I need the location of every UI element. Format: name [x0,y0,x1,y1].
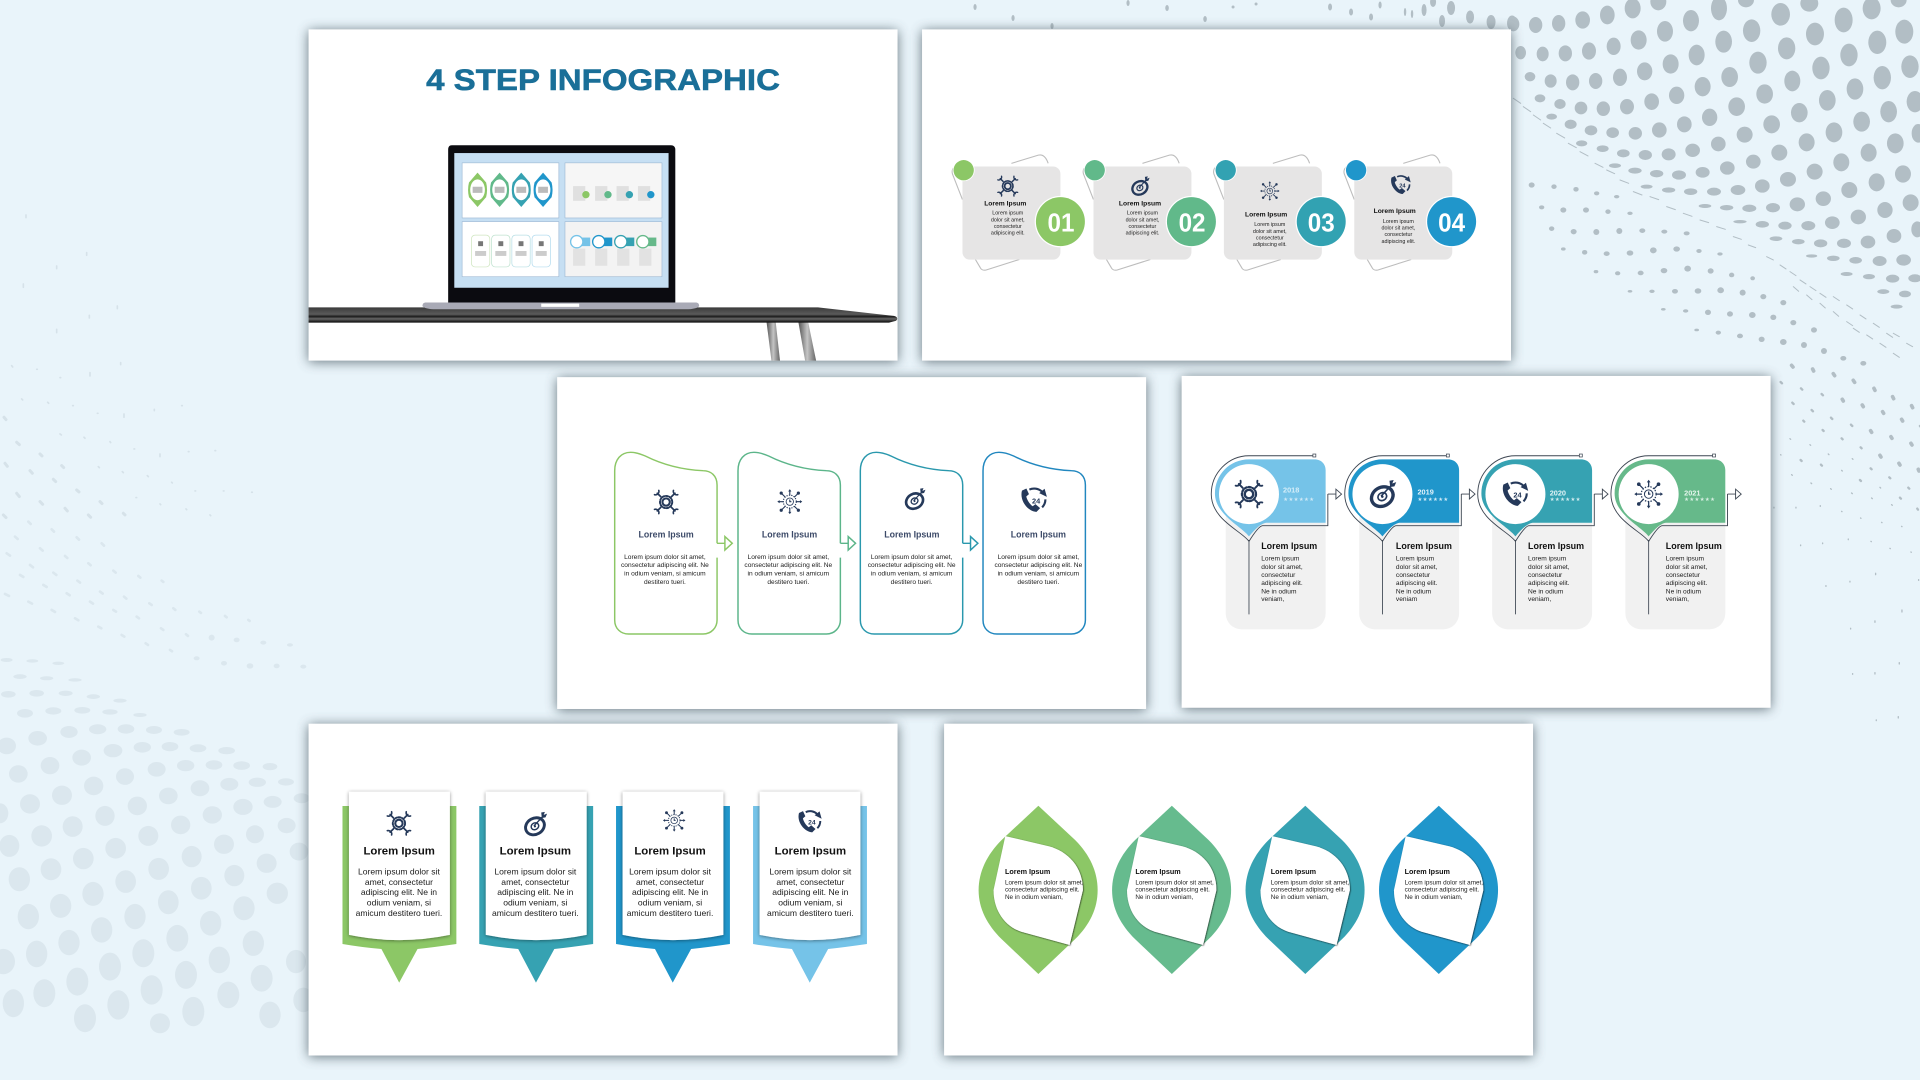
outline card 2: Lorem Ipsum [762,530,817,540]
leaf card 1 [979,806,1098,974]
banner card 2 [479,792,593,983]
timeline step 2019: Lorem ipsum [1396,556,1435,563]
banner card 1: adipiscing elit. Ne in [361,887,437,897]
banner card 3: Lorem ipsum dolor sit [629,866,712,876]
outline card 3: in odium veniam, si amicum [871,571,953,578]
banner card 1: odium veniam, si [367,897,431,907]
leaf card 1: consectetur adipiscing elit. [1005,886,1080,893]
step card 04: dolor sit amet, [1381,226,1416,232]
outline card 1: consectetur adipiscing elit. Ne [621,562,709,569]
step card 02: Lorem Ipsum [1119,201,1161,208]
banner card 2: Lorem Ipsum [500,846,571,858]
outline card 3: consectetur adipiscing elit. Ne [868,562,956,569]
leaf card 1: Ne in odium veniam, [1005,894,1063,901]
leaf card 2: consectetur adipiscing elit. [1135,886,1210,893]
slide: ribbon banner cards [309,724,898,1057]
step card 01: dolor sit amet, [991,217,1025,223]
banner card 4: Lorem Ipsum [775,846,846,858]
outline card 1: Lorem ipsum dolor sit amet, [624,554,706,561]
step card 03 [1214,155,1347,270]
leaf card 4: consectetur adipiscing elit. [1405,886,1479,893]
outline card 2: destitero tueri. [767,579,809,586]
timeline step 2019 [1345,454,1475,629]
step card 02: dolor sit amet, [1126,217,1160,223]
outline card 2: Lorem ipsum dolor sit amet, [748,554,829,561]
banner card 4: amet, consectetur [776,877,845,887]
leaf card 2: Ne in odium veniam, [1135,894,1194,901]
banner card 3: amicum destitero tueri. [627,908,713,918]
leaf card 2 [1112,806,1231,974]
outline card 1: in odium veniam, si amicum [624,571,706,578]
screen thumbnail: numbered cards [565,163,662,218]
screen thumbnail: leaf cards [462,163,559,218]
banner card 2: amicum destitero tueri. [492,908,579,918]
leaf card 3: consectetur adipiscing elit. [1271,886,1346,893]
timeline step 2020: consectetur [1528,572,1563,579]
banner card 1: Lorem ipsum dolor sit [358,866,440,876]
banner card 2: adipiscing elit. Ne in [497,887,574,897]
banner card 1: Lorem Ipsum [363,846,435,858]
timeline step 2019: veniam [1396,596,1418,603]
timeline step 2018 [1211,454,1342,629]
leaf card 4: Lorem Ipsum [1405,867,1450,876]
banner card 3: amet, consectetur [636,877,704,887]
timeline step 2021 [1611,454,1741,629]
banner card 4 [753,792,867,983]
banner card 1: amicum destitero tueri. [356,908,442,918]
timeline step 2018: adipiscing elit. [1261,580,1303,587]
step card 01: Lorem ipsum [992,211,1024,217]
step card 01: adipiscing elit. [991,231,1025,237]
step card 03: Lorem Ipsum [1245,212,1287,219]
table with laptop on it [309,145,897,361]
banner card 3: odium veniam, si [638,897,702,907]
timeline step 2021: ★★★★★★ [1684,497,1715,503]
banner card 4: 24 [808,820,816,827]
step card 04: 24 [1399,183,1406,189]
outline card 2 [738,452,856,634]
timeline step 2019: ★★★★★★ [1417,497,1449,503]
step card 02: Lorem ipsum [1127,211,1158,217]
screen thumbnail: outline cards [462,222,559,277]
outline card 4: 24 [1032,496,1041,505]
timeline step 2020: Lorem Ipsum [1528,541,1584,551]
step card 01: Lorem Ipsum [984,201,1026,208]
slide: leaf shaped cards [944,724,1533,1057]
outline card 1 [615,452,732,634]
timeline step 2020: veniam, [1528,596,1551,603]
banner card 4: Lorem ipsum dolor sit [769,866,852,876]
leaf card 3: Lorem ipsum dolor sit amet, [1271,879,1349,886]
step card 04: adipiscing elit. [1381,239,1415,245]
timeline step 2018: 2018 [1283,485,1299,494]
outline card 3: destitero tueri. [891,579,933,586]
timeline step 2021: veniam, [1666,596,1689,603]
timeline step 2018: ★★★★★★ [1283,497,1314,503]
step card 03: adipiscing elit. [1253,242,1287,248]
banner card 2: odium veniam, si [503,897,568,907]
leaf card 4: Ne in odium veniam, [1405,894,1463,901]
outline card 4: Lorem Ipsum [1011,530,1066,540]
timeline step 2019: dolor sit amet, [1396,564,1438,571]
leaf card 1: Lorem Ipsum [1005,867,1050,876]
timeline step 2019: Ne in odium [1396,588,1432,595]
step card 02: 02 [1179,209,1206,237]
timeline step 2020: Lorem ipsum [1528,556,1567,563]
leaf card 2: Lorem ipsum dolor sit amet, [1135,879,1214,886]
timeline step 2020: Ne in odium [1528,588,1564,595]
slide: numbered cards 01 to 04 [922,29,1511,362]
screen thumbnail: timeline cards [565,222,662,277]
timeline step 2018: dolor sit amet, [1261,564,1303,571]
outline card 1: Lorem Ipsum [639,530,694,540]
step card 03: Lorem ipsum [1254,222,1286,228]
timeline step 2018: veniam, [1261,596,1285,603]
banner card 3: adipiscing elit. Ne in [632,887,708,897]
step card 04: Lorem Ipsum [1374,208,1416,215]
step card 03: dolor sit amet, [1253,229,1287,235]
outline card 3: Lorem ipsum dolor sit amet, [871,554,953,561]
timeline step 2018: Lorem Ipsum [1261,541,1317,551]
banner card 4: odium veniam, si [778,897,843,907]
banner card 4: amicum destitero tueri. [767,908,854,918]
leaf card 3: Ne in odium veniam, [1271,894,1329,901]
timeline step 2021: consectetur [1666,572,1701,579]
step card 04: Lorem ipsum [1383,219,1414,225]
title: 4 STEP INFOGRAPHIC [426,64,780,97]
step card 02: consectetur [1129,224,1157,230]
outline card 2: in odium veniam, si amicum [748,571,830,578]
step card 01 [952,155,1086,270]
leaf card 2: Lorem Ipsum [1135,867,1181,876]
step card 04 [1344,155,1477,270]
leaf card 3: Lorem Ipsum [1271,867,1316,876]
step card 01: 01 [1048,209,1074,237]
slide: 4 step infographic title with laptop [309,29,898,362]
banner card 3: Lorem Ipsum [634,846,706,858]
banner card 4: adipiscing elit. Ne in [772,887,849,897]
outline card 3 [860,452,978,634]
timeline step 2021: adipiscing elit. [1666,580,1707,587]
slide: yearly timeline 2018 to 2021 [1182,376,1771,709]
timeline step 2020 [1478,454,1608,629]
laptop [422,145,699,309]
timeline step 2020: dolor sit amet, [1528,564,1570,571]
step card 01: consectetur [994,224,1022,230]
step card 04: 04 [1438,209,1466,237]
step card 04: consectetur [1384,232,1412,238]
banner card 1: amet, consectetur [365,877,433,887]
banner card 3 [616,792,730,983]
timeline step 2021: Lorem Ipsum [1666,541,1722,551]
banner card 2: amet, consectetur [501,877,570,887]
timeline step 2021: Ne in odium [1666,588,1702,595]
slide: outline cards with arrows [557,377,1146,710]
leaf card 4: Lorem ipsum dolor sit amet, [1405,879,1483,886]
timeline step 2018: Lorem ipsum [1261,556,1300,563]
timeline step 2019: 2019 [1417,488,1434,497]
timeline step 2020: 2020 [1550,488,1566,497]
leaf card 4 [1379,806,1498,974]
outline card 4 [983,452,1085,634]
outline card 3: Lorem Ipsum [884,530,940,540]
timeline step 2020: ★★★★★★ [1550,497,1581,503]
timeline step 2021: Lorem ipsum [1666,556,1704,563]
timeline step 2020: 24 [1513,490,1522,499]
outline card 2: consectetur adipiscing elit. Ne [744,562,833,569]
timeline step 2019: consectetur [1396,572,1431,579]
outline card 1: destitero tueri. [644,579,686,586]
banner card 1 [342,792,456,983]
leaf card 1: Lorem ipsum dolor sit amet, [1005,879,1084,886]
step card 03: consectetur [1256,236,1284,242]
banner card 2: Lorem ipsum dolor sit [494,866,577,876]
outline card 4: consectetur adipiscing elit. Ne [994,562,1083,569]
leaf card 3 [1246,806,1365,974]
timeline step 2021: 2021 [1684,488,1700,497]
outline card 4: destitero tueri. [1017,579,1059,586]
timeline step 2021: dolor sit amet, [1666,564,1707,571]
step card 03: 03 [1308,209,1335,237]
outline card 4: in odium veniam, si amicum [998,571,1080,578]
timeline step 2018: consectetur [1261,572,1296,579]
outline card 4: Lorem ipsum dolor sit amet, [998,554,1079,561]
step card 02: adipiscing elit. [1126,231,1159,237]
step card 02 [1083,155,1217,270]
timeline step 2019: adipiscing elit. [1396,580,1438,587]
timeline step 2019: Lorem Ipsum [1396,541,1452,551]
timeline step 2020: adipiscing elit. [1528,580,1570,587]
timeline step 2018: Ne in odium [1261,588,1297,595]
